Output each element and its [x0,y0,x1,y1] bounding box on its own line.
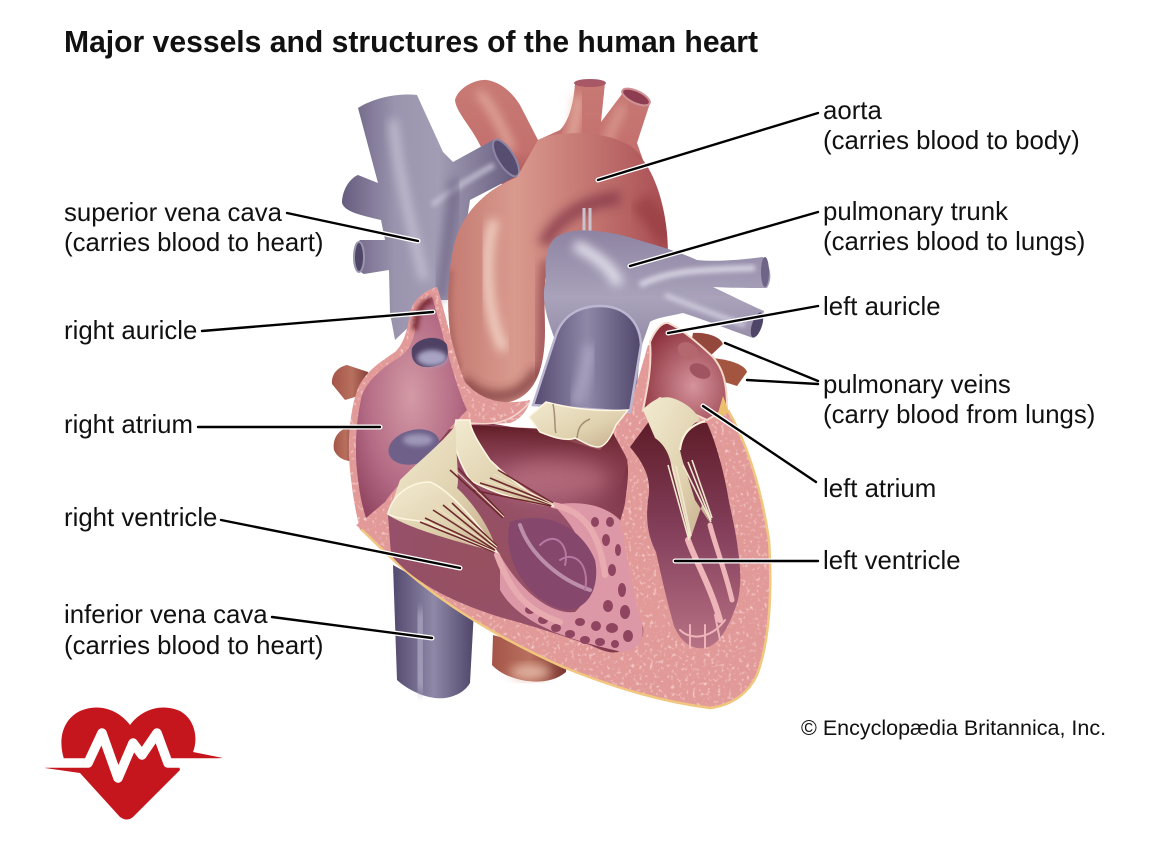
label: superior vena cava: superior vena cava [64,199,282,227]
myocardium wall of both ventricles [356,345,770,708]
right ventricle cavity [388,420,643,652]
fat rim [360,410,770,708]
vessel: lower coronary vein [492,635,567,682]
opening of inferior vena cava [384,424,444,470]
leader: right atrium [198,424,380,430]
label: pulmonary trunk: (carries blood to lungs) [823,228,1085,256]
vessel: inferior vena cava [393,565,474,698]
leader: inferior vena cava [272,617,432,638]
leader: aorta [598,113,818,180]
label: inferior vena cava: inferior vena cava [64,601,268,629]
leader: left auricle [668,306,818,333]
left ventricle cavity [630,420,740,648]
trabeculae: purple recess [508,518,596,610]
label: aorta: (carries blood to body) [823,127,1080,155]
leader: right ventricle [221,520,460,568]
label: superior vena cava: (carries blood to heart) [64,229,324,257]
tricuspid valve [388,420,554,552]
label: aorta: aorta [823,97,882,125]
label: pulmonary trunk: pulmonary trunk [823,198,1008,226]
label: pulmonary veins: (carry blood from lungs) [823,401,1095,429]
copyright: © Encyclopædia Britannica, Inc. [801,716,1106,740]
label: inferior vena cava: (carries blood to heart) [64,632,324,660]
label: right atrium: right atrium [64,411,193,439]
leader: pulmonary veins [725,343,818,384]
left atrium [643,323,729,420]
leader: pulmonary trunk [630,212,818,266]
heart illustration [332,79,770,708]
pulmonary valve [529,402,628,447]
vessel: pulmonary trunk [534,230,770,400]
label: pulmonary veins: pulmonary veins [823,371,1011,399]
trabeculae: pale network with recesses [500,503,643,652]
label: left ventricle: left ventricle [823,547,961,575]
right atrium [349,287,530,530]
vessel: aorta body [448,133,670,403]
label: left atrium: left atrium [823,475,936,503]
leader: left atrium [703,406,816,482]
ligament between aorta and pulmonary trunk [584,208,590,231]
label: left auricle: left auricle [823,293,941,321]
vessel: superior vena cava [342,95,524,340]
leader: superior vena cava [287,213,418,241]
vessels: left pulmonary veins [690,333,747,386]
mitral valve [643,397,712,540]
vessels: right pulmonary veins [332,365,372,461]
label: right auricle: right auricle [64,317,197,345]
trabeculae strands [497,505,605,622]
opening of superior vena cava [412,338,448,367]
vessel: aortic arch branches [455,79,652,200]
leader: right auricle [202,312,433,331]
title: Major vessels and structures of the human heart [64,26,758,59]
leader: left ventricle [675,558,818,564]
icon: heart with pulse line [40,707,235,820]
chordae tendineae [420,468,553,552]
pulmonary trunk opening [533,306,641,412]
label: right ventricle: right ventricle [64,504,217,532]
